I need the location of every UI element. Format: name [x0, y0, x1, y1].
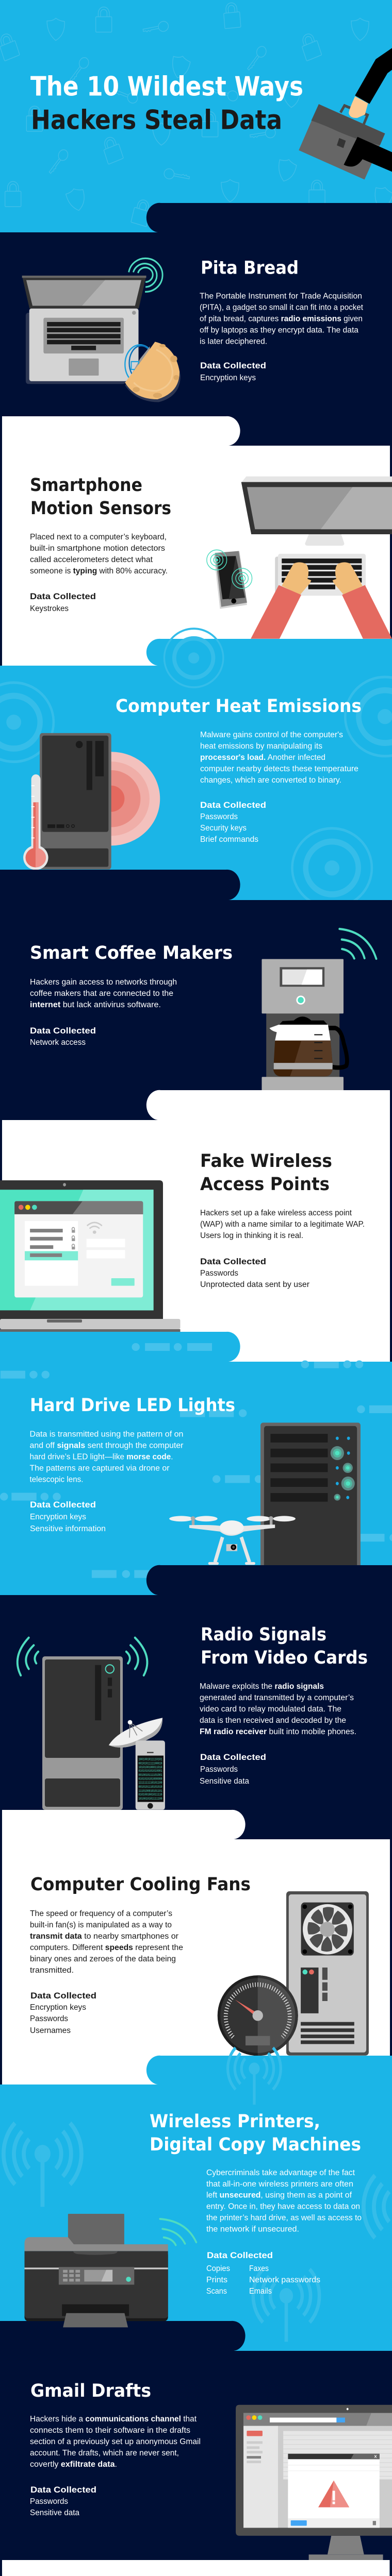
panel: smartphone motion sensors — [2, 416, 392, 666]
heading: Wireless Printers, — [150, 2111, 320, 2132]
text block: description: that all-in-one wireless printers are often — [206, 2180, 353, 2189]
icon: coffee maker — [262, 929, 376, 1091]
data collected — [206, 2250, 320, 2296]
data collected: Data Collected — [30, 1026, 96, 1036]
text block: description: Data is transmitted using the pattern of on — [30, 1430, 184, 1438]
text block: description: binary ones and zeroes of the data being — [30, 1955, 176, 1963]
text block: description: Hackers gain access to networks through — [30, 978, 177, 987]
icon: tower, satellite dish and phone: 0010101110101010 — [139, 1785, 162, 1789]
text block: description: processor's load. Another infected — [200, 753, 325, 762]
data collected: Passwords — [200, 1765, 238, 1774]
text block: description: is later deciphered. — [200, 337, 267, 346]
icon: printer — [25, 2214, 196, 2327]
heading — [150, 2111, 361, 2155]
icon: monitor, keyboard, hands and phone — [207, 477, 392, 639]
heading: Access Points — [200, 1174, 330, 1195]
icon: tower, satellite dish and phone: 0101010101000000 — [139, 1777, 162, 1781]
heading — [201, 1624, 368, 1668]
text block: description: generated and transmitted by a computer’s — [200, 1693, 354, 1702]
text block: description: the network if unsecured. — [206, 2225, 299, 2234]
text block: description: Malware exploits the radio signals — [200, 1682, 324, 1691]
text block: description: Cybercriminals take advantage of the fact — [206, 2168, 355, 2177]
heading: Computer Cooling Fans — [30, 1874, 251, 1895]
text block: description: the printer’s hard drive, as well as access to — [206, 2213, 362, 2223]
panel: pita bread — [0, 203, 392, 446]
heading: Gmail Drafts — [30, 2381, 151, 2401]
text block: description: connects them to their software in the drafts — [30, 2426, 190, 2435]
data collected — [200, 1752, 266, 1786]
text block: description: (WAP) with a name similar to a legitimate WAP. — [200, 1220, 365, 1229]
icon: tower, satellite dish and phone — [18, 1638, 165, 1810]
icon: server tower and drone — [169, 1422, 361, 1571]
data collected — [30, 1026, 96, 1047]
data collected: Emails — [249, 2287, 272, 2296]
panel: hard drive LED lights — [0, 1332, 392, 1595]
panel: wireless printers, digital copy machines — [0, 2048, 392, 2351]
data collected: Encryption keys — [30, 1513, 86, 1521]
data collected: Encryption keys — [30, 2003, 86, 2012]
heading: From Video Cards — [201, 1648, 368, 1668]
data collected: Data Collected — [200, 1257, 266, 1266]
icon: monitor with warning dialog — [236, 2405, 392, 2561]
data collected: Keystrokes — [30, 604, 69, 613]
text block: description: changes, which are converted to binary. — [200, 776, 341, 785]
text block: description: section of a previously set up anonymous Gmail — [30, 2437, 201, 2446]
text block: description: called accelerometers detect what — [30, 555, 153, 564]
title: The 10 Wildest Ways — [30, 71, 303, 102]
heading: Computer Heat Emissions — [116, 696, 362, 717]
text block: description: someone is typing with 80% accuracy. — [30, 567, 168, 575]
text block: description: The patterns are captured via drone or — [30, 1464, 169, 1472]
text block: description: (PITA), a gadget so small it can fit into a pocket — [200, 303, 364, 312]
text block: description — [30, 533, 168, 575]
data collected — [30, 2485, 96, 2517]
text block: description: heat emissions by manipulating its — [200, 742, 322, 751]
data collected: Sensitive information — [30, 1524, 106, 1533]
heading: Digital Copy Machines — [150, 2134, 361, 2155]
data collected — [200, 800, 266, 844]
panel: computer heat emissions — [0, 629, 392, 908]
text block: description — [200, 1682, 356, 1736]
text block: description: transmitted. — [30, 1966, 74, 1975]
text block: description: FM radio receiver built into mobile phones. — [200, 1727, 356, 1736]
text block: description: and off signals sent through the computer — [30, 1441, 184, 1450]
text block: description: telescopic lens. — [30, 1475, 84, 1484]
data collected: Sensitive data — [30, 2509, 79, 2517]
data collected: Security keys — [200, 824, 247, 833]
data collected: Faxes — [249, 2264, 269, 2273]
icon: tower, satellite dish and phone: 1111111110101100 — [139, 1781, 162, 1785]
text block: description: Placed next to a computer’s keyboard, — [30, 533, 167, 541]
text block: description: hard drive’s LED light—like morse code. — [30, 1452, 173, 1461]
icon: tower, satellite dish and phone: 1110100010101101 — [139, 1789, 162, 1793]
data collected: Network passwords — [249, 2276, 320, 2284]
icon: laptop with pita — [22, 258, 181, 402]
icon: tower, satellite dish and phone: 0101010101010001 — [139, 1769, 162, 1773]
text block: description — [200, 292, 364, 346]
data collected: Copies — [206, 2264, 230, 2273]
data collected: Data Collected — [200, 800, 266, 810]
text block: description — [200, 731, 358, 785]
text block: description: built-in smartphone motion detectors — [30, 544, 165, 553]
heading: Radio Signals — [201, 1624, 326, 1645]
panel: fake wireless access points — [0, 1090, 390, 1362]
panel: smart coffee makers — [0, 870, 392, 1120]
text block: description: data is then received and decoded by the — [200, 1716, 346, 1725]
text block: description: Users log in thinking it is real. — [200, 1231, 303, 1240]
text block: description: left unsecured, using them as a point of — [206, 2191, 352, 2200]
data collected: Data Collected — [30, 1500, 96, 1510]
text block: description: computer nearby detects these temperature — [200, 765, 358, 773]
icon: tower with fan and speed gauge — [218, 1891, 369, 2056]
heading: Motion Sensors — [30, 498, 171, 519]
text block: description: off by laptops as they encrypt data. The data — [200, 326, 358, 334]
text block: description: internet but lack antivirus software. — [30, 1001, 161, 1009]
data collected: Data Collected — [30, 1991, 96, 2001]
text block: description: coffee makers that are connected to the — [30, 989, 173, 998]
icon: tower with heat and thermometer — [23, 733, 160, 870]
heading: Pita Bread — [201, 258, 299, 278]
heading — [200, 1151, 332, 1195]
title — [30, 71, 303, 136]
data collected: Scans — [206, 2287, 227, 2296]
text block: description — [30, 1430, 184, 1484]
text block: description: video card to relay modulated data. The — [200, 1705, 341, 1714]
text block: description: built-in fan(s) is manipulated as a way to — [30, 1921, 172, 1929]
text block: description — [206, 2168, 362, 2234]
icon: tower, satellite dish and phone: 0010010111101001 — [139, 1773, 162, 1777]
text block: description — [30, 978, 177, 1009]
text block: description — [200, 1209, 365, 1240]
icon: hands with briefcase — [299, 48, 392, 180]
data collected: Data Collected — [30, 2485, 96, 2495]
data collected: Unprotected data sent by user — [200, 1280, 309, 1289]
text block: description: of pita bread, captures radio emissions given — [200, 314, 363, 323]
panel: hero header — [0, 0, 392, 232]
data collected: Brief commands — [200, 835, 258, 844]
title: Hackers Steal Data — [31, 105, 282, 136]
text block: description: The Portable Instrument for Trade Acquisition — [200, 292, 362, 300]
text block: description: The speed or frequency of a computer’s — [30, 1909, 172, 1918]
panel: radio signals from video cards — [0, 1565, 392, 1839]
data collected: Data Collected — [207, 2250, 273, 2260]
text block: description: transmit data to nearby smartphones or — [30, 1932, 178, 1941]
data collected — [200, 1257, 309, 1289]
text block: description: account. The drafts, which are never sent, — [30, 2449, 179, 2458]
text block: description: entry. Once in, they have access to data on — [206, 2202, 360, 2211]
data collected: Encryption keys — [200, 374, 256, 382]
data collected — [30, 591, 96, 613]
icon: tower, satellite dish and phone: 1010010101111100 — [139, 1797, 162, 1801]
data collected: Passwords — [30, 2014, 68, 2023]
icon: tower, satellite dish and phone: 0101001001011110 — [139, 1793, 162, 1797]
data collected: Network access — [30, 1038, 86, 1047]
data collected — [200, 361, 266, 382]
text block: description: Hackers set up a fake wireless access point — [200, 1209, 352, 1217]
text block: description: Malware gains control of the computer's — [200, 731, 343, 739]
panel: gmail drafts — [0, 2214, 392, 2563]
data collected: Sensitive data — [200, 1777, 249, 1786]
panel: footer — [2, 2560, 390, 2576]
heading: Hard Drive LED Lights — [30, 1395, 235, 1416]
data collected — [30, 1991, 96, 2035]
heading: Fake Wireless — [200, 1151, 332, 1172]
icon: tower, satellite dish and phone: 0010101111100010 — [139, 1761, 162, 1765]
data collected: Usernames — [30, 2026, 71, 2035]
data collected: Passwords — [200, 1269, 238, 1278]
icon: laptop with login window — [0, 1180, 181, 1332]
heading — [30, 475, 171, 519]
panel: computer cooling fans — [2, 1810, 390, 2084]
data collected: Passwords — [200, 812, 238, 821]
data collected: Prints — [206, 2276, 227, 2284]
icon: tower, satellite dish and phone: 1001001011110101 — [139, 1757, 162, 1761]
text block: description: computers. Different speeds represent the — [30, 1943, 183, 1952]
text block: description: Hackers hide a communications channel that — [30, 2415, 197, 2424]
data collected: Data Collected — [200, 361, 266, 370]
data collected: Passwords — [30, 2497, 68, 2506]
data collected: Data Collected — [200, 1752, 266, 1762]
heading: Smart Coffee Makers — [30, 943, 233, 963]
heading: Smartphone — [30, 475, 142, 496]
text block: description — [30, 2415, 201, 2469]
text block: description — [30, 1909, 183, 1975]
icon: tower, satellite dish and phone: 1010100100011010 — [139, 1766, 162, 1769]
text block: description: covertly exfiltrate data . — [30, 2460, 117, 2469]
data collected: Data Collected — [30, 591, 96, 601]
data collected — [30, 1500, 106, 1533]
